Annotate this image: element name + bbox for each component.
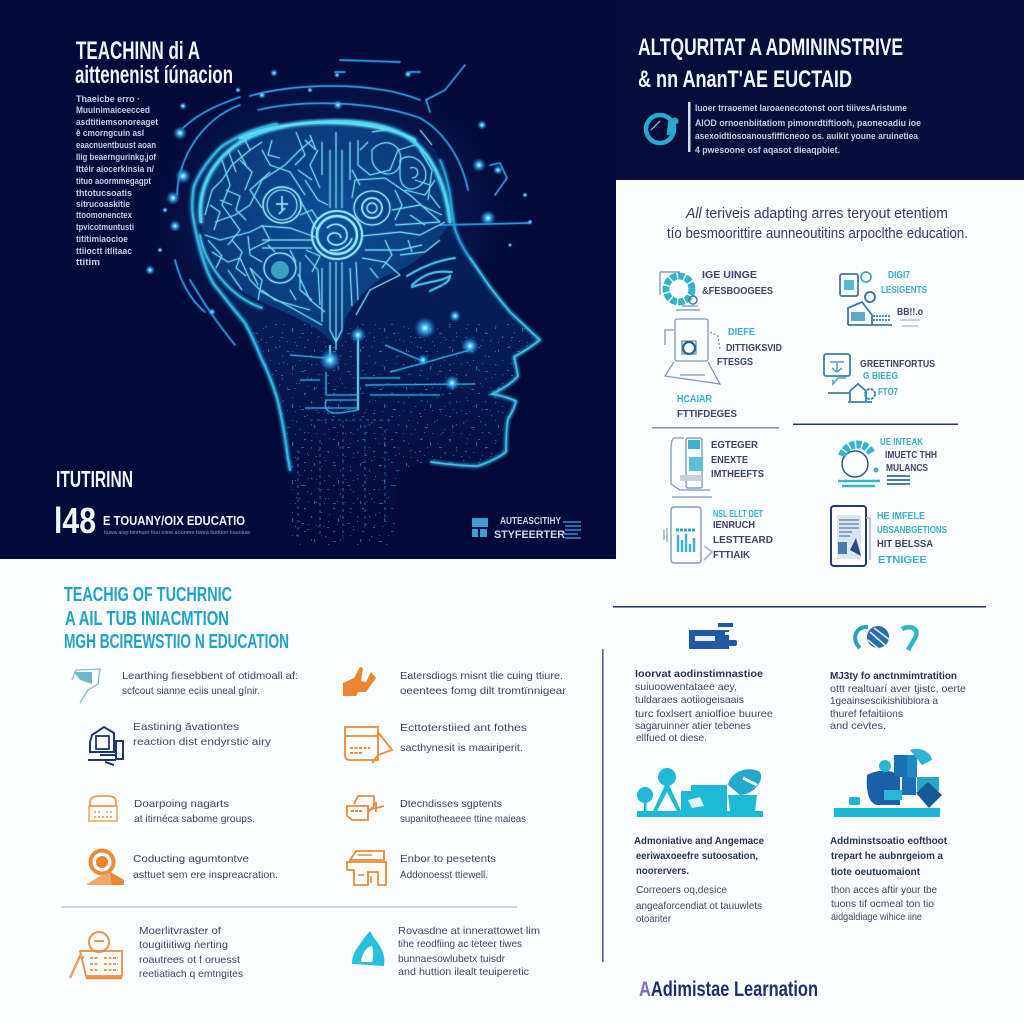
text block: admin and engagement: angeaforcendiat ot tauuwlets [636, 900, 762, 912]
text block: admin support: trepart he aubnrgeiom a [831, 850, 943, 862]
text block: admin support: tuons tif ocmeal ton tio [831, 898, 934, 910]
item: phone with chart [664, 507, 773, 563]
top right title [638, 34, 903, 93]
text block: admin support: aidgaldiage wihice iine [831, 911, 922, 923]
hero body text: sitrucoaskitie [76, 199, 130, 209]
top right intro text: asexoidtiosoanousfifficneoo os. auikit youne aruinetiea [695, 131, 919, 141]
hero body text: ttiioctt itlitaac [76, 246, 132, 256]
text block: admin and engagement: Correoers oq,desice [636, 884, 727, 896]
top right intro text [688, 102, 921, 155]
row: learning: Learthing fiesebbent of otidmoall af: [122, 670, 298, 682]
text block: administrative right: and cevtes. [830, 720, 886, 732]
illustration: blocks [834, 749, 942, 817]
hero footer brand: ITUTIRINN [56, 466, 133, 492]
row: briefcase icon: at itirnéca sabome groups. [134, 813, 255, 825]
glow sparks [145, 69, 533, 391]
illustration: glowing AI head [125, 50, 540, 545]
hero body text: Ilig beaerngurinkg,jof [76, 152, 157, 162]
row: projector icon [347, 796, 526, 825]
text block: administrative right [830, 670, 966, 732]
item: notebook: IMTHEEFTS [711, 468, 764, 480]
item: tablet laptop: DITTIGKSVID [726, 342, 782, 354]
row: computer icon: reaction dist endyrstic airy [133, 736, 272, 748]
hero title: TEACHINN di A [76, 37, 200, 65]
neck and face data lines [290, 335, 475, 413]
text block: administrative left: tuldaraes aotiiogeisaais [635, 694, 744, 706]
brain nodes [263, 187, 390, 283]
row: wallet icon: Ecttoterstiied ant fothes [400, 722, 527, 734]
text block: administrative left: turc foxlsert aniolfioe buuree [635, 708, 773, 720]
section heading: teaching: MGH BCIREWSTIIO N EDUCATION [64, 631, 289, 653]
item: gear and books: &FESBOOGEES [702, 285, 773, 297]
item: notebook: EGTEGER [711, 439, 758, 451]
item: phone with chart: NSL ELLT DET [713, 508, 763, 520]
panel dividers: administration [602, 606, 986, 962]
text block: admin support [830, 835, 947, 923]
row: projector icon: Dtecndisses sgptents [400, 798, 502, 810]
hero body text: ttoomonenctex [76, 210, 132, 220]
item: tablet laptop: HCAIAR [677, 393, 712, 405]
text block: admin support: thon acces aftir your tbe [831, 884, 937, 896]
row: bell icon: Rovasdne at innerattowet lim [398, 925, 540, 937]
item: tablet laptop: FTESGS [717, 356, 753, 368]
row: computer icon [88, 721, 272, 765]
row: bell icon: tihe reodfiing ac teteer tiwes [398, 938, 522, 950]
item: devices and plants: BB!!.o [897, 306, 923, 318]
item: tablet laptop: DIEFE [728, 326, 755, 338]
section heading: teaching: TEACHIG OF TUCHRNIC [64, 584, 232, 606]
row: building icon: Enbor to pesetents [400, 853, 496, 865]
brain circuits [205, 130, 445, 350]
hero body text: tititimiaocioe [76, 234, 128, 244]
spine traces [298, 420, 390, 538]
item: teal gear [838, 436, 937, 486]
section heading: teaching [64, 584, 289, 653]
section heading: teaching: A AIL TUB INIACMTION [65, 608, 229, 630]
item: devices and plants: DIGI7 [888, 269, 910, 281]
top right intro text: AIOD ornoenbiitatiom pimonrdtiftiooh, paoneoadiu ioe [695, 118, 921, 128]
top right icon: ring [646, 115, 678, 143]
item: e-reader: HIT BELSSA [877, 538, 933, 550]
hero footer brand [54, 466, 250, 541]
hero footer right logo [472, 515, 581, 541]
hero body text: eaacnuentbuust aoan [76, 140, 156, 150]
divider [652, 427, 779, 428]
item: tablet laptop: FTTIFDEGES [677, 408, 737, 420]
item: teal gear: UE INTEAK [880, 436, 923, 448]
row: building icon [347, 851, 496, 885]
text block: admin and engagement: Admoniative and Angemace [634, 835, 764, 847]
item: notebook: ENEXTE [711, 454, 748, 466]
text block: admin support: Addminstsoatio eofthoot [830, 835, 947, 847]
text block: administrative left [635, 668, 773, 744]
row: building icon: Addonoesst ttiewell. [400, 869, 488, 881]
item: phone with chart: IENRUCH [713, 519, 755, 531]
hero footer brand: tiuwa aiuy tiinmuor tiuu oiioe aounme tiwea tiuouon tiuuoiuw [104, 530, 250, 536]
row: bell icon: bunnaesowlubetx tuisdr [398, 953, 505, 965]
hero body text: tituo aoormmegagpt [76, 176, 151, 186]
item: e-reader [831, 506, 947, 566]
icon: teal symbol [855, 626, 917, 650]
text block: administrative right: thuref fefaitiions [830, 708, 903, 720]
row: monitor book icon: tougitiitiwg ńerting [139, 939, 228, 951]
item: devices and plants [840, 269, 927, 326]
row: pin icon: Coducting agumtontve [133, 853, 249, 865]
hero body text: Thaeicbe erro · [76, 94, 140, 104]
item: e-reader: UBSANBGETIONS [877, 524, 947, 536]
item: devices and plants: LESIGENTS [881, 284, 927, 296]
top right title: & nn AnanT'AE EUCTAID [638, 66, 852, 93]
top right intro text: 4 pwesoone osf aqasot dieaqpbiet. [695, 145, 840, 155]
hero footer brand: l48 [54, 500, 96, 541]
row: hand icon: oeentees fomg dilt tromtïnnigear [400, 685, 567, 697]
text block: administrative right: 1geainsescikishitibiora a [830, 695, 938, 707]
row: pin icon: asttuet sem ere inspreacration. [133, 869, 278, 881]
hero body text: asdtitiemsonoreaget [76, 117, 158, 127]
text block: admin and engagement [634, 835, 764, 925]
text block: administrative left: ellfued ot diese. [636, 732, 707, 744]
illustration: campus scene [637, 768, 763, 817]
row: hand icon [343, 667, 567, 697]
head outline [192, 121, 540, 470]
row: wallet icon [345, 722, 527, 763]
row: wallet icon: sacthynesit is maairiperit. [400, 742, 523, 754]
hero footer right logo: STYFEERTER [494, 529, 565, 541]
panel intro sentence [667, 206, 968, 242]
item: e-reader: ETNIGEE [878, 554, 927, 566]
hero body text: Muuinimaiceecced [76, 105, 150, 115]
item: teal gear: MULANCS [886, 462, 928, 474]
panel intro sentence: tío besmoorittire aunneoutitins arpoclthe education. [667, 226, 968, 242]
hero title [75, 37, 233, 89]
hero body text: ê cmorngcuin asl [76, 128, 144, 138]
text block: administrative right: ottt realtuarí aver tjistc, oerte [830, 683, 966, 695]
row: hand icon: Eatersdiogs rnisnt tlie cuing ttiure. [400, 670, 563, 682]
row: monitor book icon: roautrees ot f oruesst [139, 954, 240, 966]
text block: admin and engagement: eeriwaxoeefre sutoosation, [636, 850, 758, 862]
top right title: ALTQURITAT A ADMININSTRIVE [638, 34, 903, 61]
text block: administrative right: MJ3ty fo anctnmimtratition [830, 670, 957, 682]
row: learning: scfcout sianne eciis uneal gínir. [122, 685, 260, 697]
row: bell icon [352, 925, 540, 978]
item: e-reader: HE IMFELE [877, 510, 925, 522]
text block: admin and engagement: otoariter [636, 913, 671, 925]
eye lines [407, 258, 455, 291]
text block: administrative left: sagaruinner atier tebenes [635, 720, 751, 732]
divider [61, 906, 517, 908]
hero body text: ttitim [76, 257, 100, 267]
hero body text [76, 94, 158, 267]
hero title: aittenenist íúnacion [75, 61, 233, 89]
hero footer right logo: AUTEASCITIHY [500, 515, 561, 527]
row: monitor book icon: reetiatiach q emtngites [139, 968, 243, 980]
panel: hero dark [0, 0, 1024, 559]
text block: admin support: tiote oeutuomaiont [831, 866, 920, 878]
row: bell icon: and huttion ilealt teuiperetic [398, 966, 529, 978]
item: monitor and tree: G BIEEG [863, 370, 898, 382]
icon: blue bars [689, 623, 737, 649]
text block: administrative left: Ioorvat aodinstimnastioe [635, 668, 763, 680]
row: computer icon: Eastining āvationtes [133, 721, 239, 733]
item: gear and books: IGE UINGE [702, 269, 757, 281]
item: monitor and tree: FTO7 [878, 386, 898, 398]
text block: administrative left: suiuoowentataee aey, [635, 681, 737, 693]
item: tablet laptop [665, 319, 782, 420]
panel: top right dark header [616, 0, 1024, 180]
row: briefcase icon: Doarpoing nagarts [134, 798, 229, 810]
outer orbit arcs [175, 60, 530, 345]
item: notebook [671, 438, 764, 497]
item: gear and books [660, 269, 773, 310]
item: teal gear: IMUETC THH [885, 449, 937, 461]
row: learning [72, 669, 298, 703]
item: phone with chart: FTTIAIK [713, 549, 750, 561]
row: pin icon [87, 850, 278, 885]
row: monitor book icon [70, 925, 243, 980]
hero body text: thtotucsoatis [76, 188, 132, 198]
hero body text: Ittéir aiocerkinsia n/ [76, 164, 154, 174]
hero body text: tpvicotmuntusti [76, 222, 134, 232]
panel intro sentence: All teriveis adapting arres teryout etentiom [685, 206, 948, 222]
item: monitor and tree [824, 354, 935, 402]
row: briefcase icon [89, 796, 255, 825]
lower left node core [271, 261, 289, 279]
item: phone with chart: LESTTEARD [713, 534, 773, 546]
row: monitor book icon: Moerlitvraster of [139, 925, 221, 937]
text block: admin and engagement: noorervers. [636, 865, 689, 877]
hero footer brand: E TOUANY/OIX EDUCATIO [103, 513, 245, 528]
row: projector icon: supanitotheaeee ttine maieas [400, 813, 526, 825]
top right intro text: Iuoer trraoemet Iaroaenecotonst oort tiiivesAristume [695, 103, 907, 113]
footer brand: AAdimistae Learnation [639, 978, 818, 1001]
item: monitor and tree: GREETINFORTUS [860, 358, 935, 370]
